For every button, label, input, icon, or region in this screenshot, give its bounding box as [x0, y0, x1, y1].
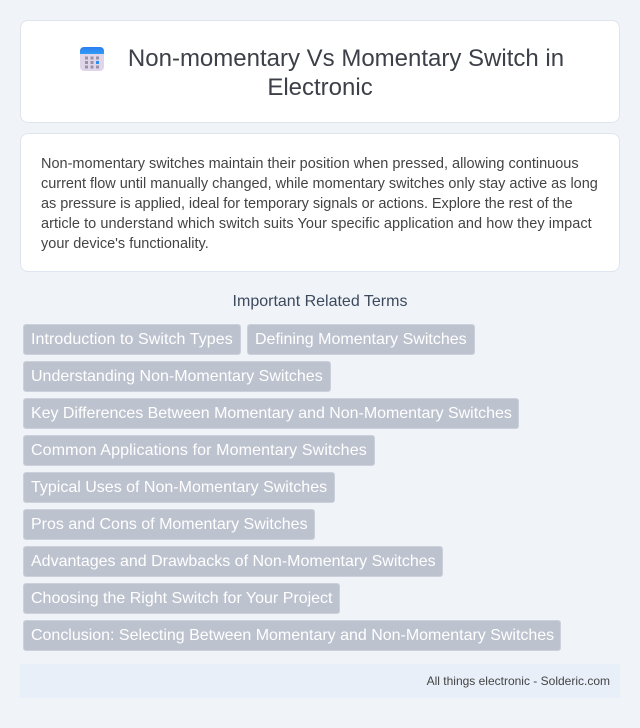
tag 3: Understanding Non-Momentary Switches	[31, 368, 323, 385]
tag 4	[23, 398, 519, 429]
tag 7	[23, 509, 315, 540]
tag 1	[23, 324, 241, 355]
text line 4: article to understand which switch suits Your specific application and how they impact	[41, 216, 592, 232]
tag 6: Typical Uses of Non-Momentary Switches	[31, 479, 327, 496]
tag 7: Pros and Cons of Momentary Switches	[31, 516, 308, 533]
tag 4: Key Differences Between Momentary and Non-Momentary Switches	[31, 405, 512, 422]
title: Electronic	[267, 74, 373, 101]
tag 1: Introduction to Switch Types	[31, 331, 233, 348]
tag 8	[23, 546, 443, 577]
tag 5: Common Applications for Momentary Switches	[31, 442, 367, 459]
tag 8: Advantages and Drawbacks of Non-Momentary Switches	[31, 553, 436, 570]
panel: intro text	[20, 133, 620, 272]
tag 10	[23, 620, 561, 651]
tag 5	[23, 435, 375, 466]
tag 2	[247, 324, 475, 355]
tag 2: Defining Momentary Switches	[255, 331, 467, 348]
text line 3: as pressure is applied, ideal for temporary signals or actions. Explore the rest of the	[41, 196, 573, 212]
tag 9	[23, 583, 340, 614]
tag 10: Conclusion: Selecting Between Momentary and Non-Momentary Switches	[31, 627, 554, 644]
text line 1: Non-momentary switches maintain their position when pressed, allowing continuous	[41, 156, 579, 172]
icon: calendar grid	[80, 47, 104, 71]
tag 3	[23, 361, 331, 392]
panel: title card	[20, 20, 620, 123]
tag 6	[23, 472, 335, 503]
tag 9: Choosing the Right Switch for Your Project	[31, 590, 332, 607]
title: Non-momentary Vs Momentary Switch in	[128, 45, 564, 72]
title	[128, 45, 564, 101]
footer text: All things electronic - Solderic.com	[427, 674, 610, 688]
text line 2: current flow until manually changed, while momentary switches only stay active as long	[41, 176, 598, 192]
footer	[20, 664, 620, 698]
heading: related terms: Important Related Terms	[233, 293, 407, 310]
text line 5: your device's functionality.	[41, 236, 209, 252]
